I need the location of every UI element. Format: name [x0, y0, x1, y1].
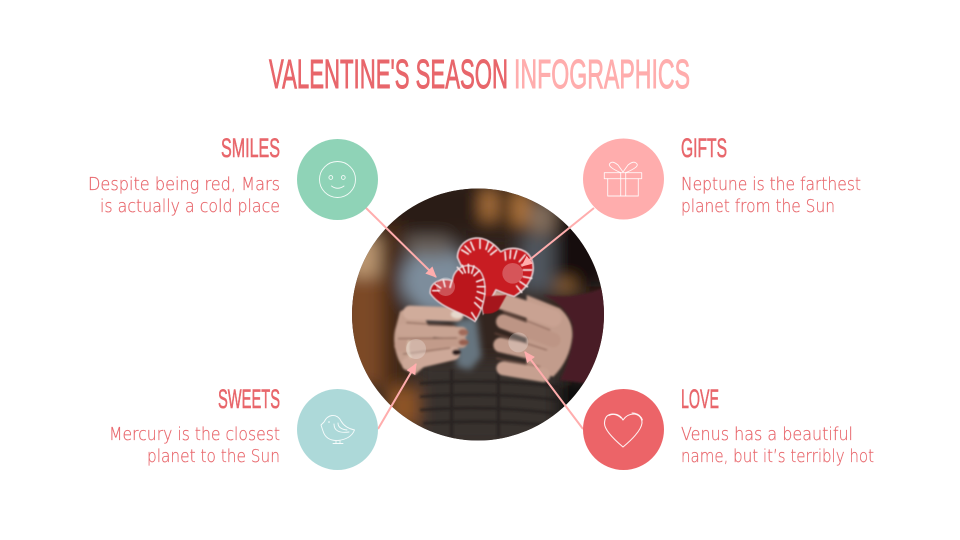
- icon: sweets circle with bird: [297, 389, 378, 470]
- text block: smiles: [88, 133, 280, 217]
- text block: love: Venus has a beautiful: [681, 425, 853, 445]
- text block: gifts: Neptune is the farthest: [681, 175, 861, 195]
- arrow: gifts: [522, 208, 594, 266]
- sweater detail: [455, 317, 482, 370]
- icon: gifts circle with present: [583, 138, 664, 220]
- text block: gifts: GIFTS: [681, 133, 727, 163]
- icon: love circle with heart: [583, 389, 664, 470]
- text block: love: [681, 384, 874, 467]
- central photo: hands holding felt hearts: [352, 188, 604, 440]
- text block: gifts: [681, 133, 861, 217]
- text block: sweets: [109, 384, 280, 467]
- sleeve: [543, 287, 607, 383]
- title: INFOGRAPHICS: [514, 51, 690, 97]
- icon: smiles circle with smiley: [297, 139, 378, 220]
- arrow: sweets: [378, 364, 416, 429]
- text block: smiles: SMILES: [221, 133, 280, 163]
- title: VALENTINE'S SEASON: [269, 51, 508, 97]
- text block: sweets: SWEETS: [218, 384, 280, 414]
- text block: sweets: Mercury is the closest: [109, 425, 280, 445]
- red felt hearts: [430, 238, 533, 322]
- right hand: [483, 292, 572, 377]
- text block: smiles: Despite being red, Mars: [88, 175, 280, 195]
- arrow: smiles: [366, 208, 436, 277]
- text block: gifts: planet from the Sun: [681, 197, 835, 217]
- text block: love: name, but it’s terribly hot: [681, 447, 874, 467]
- text block: love: LOVE: [681, 384, 719, 414]
- left hand: [394, 306, 469, 375]
- text block: smiles: is actually a cold place: [100, 197, 280, 217]
- translucent arrow-end dots: [406, 263, 528, 359]
- arrow: love: [525, 352, 583, 429]
- text block: sweets: planet to the Sun: [147, 447, 280, 467]
